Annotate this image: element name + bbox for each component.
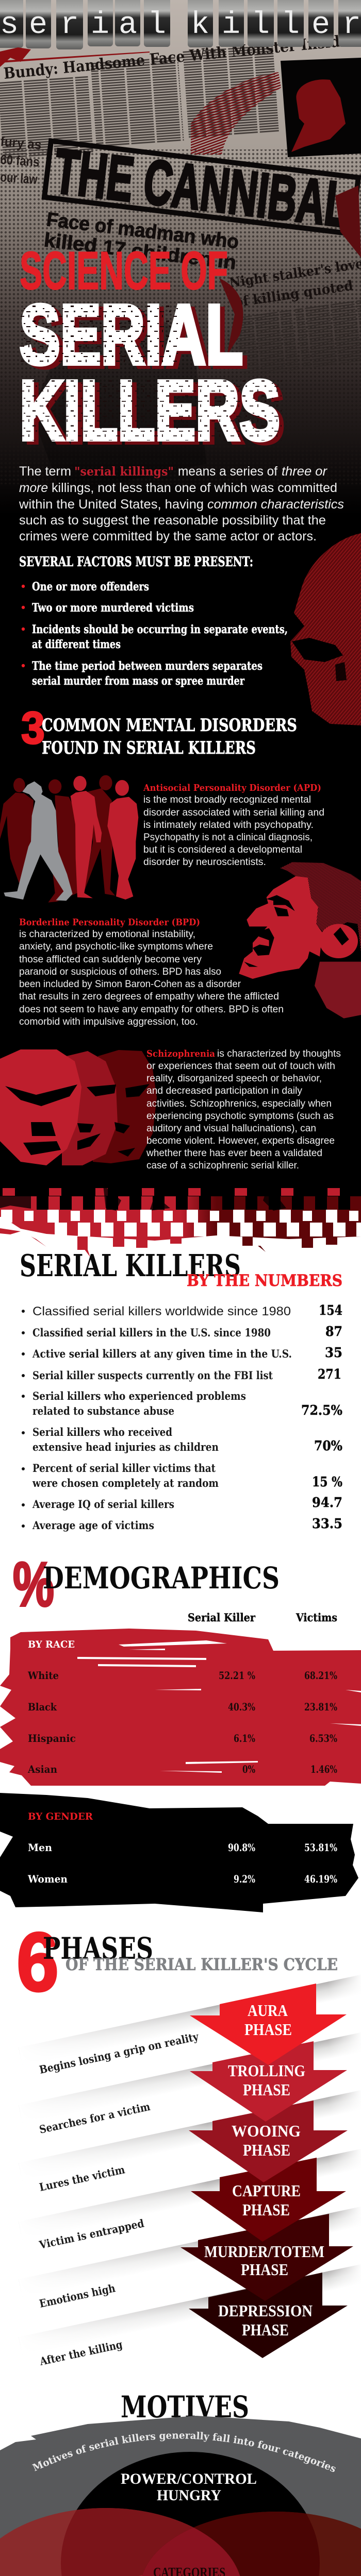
red rows: 68.21% [304,1669,337,1682]
intro paragraph: more [19,481,48,495]
typewriter keys: serial killer: e [311,8,330,43]
heading: 6 phases [17,1916,338,2009]
BPD text block: is characterized by emotional instability, [19,928,195,940]
typewriter keys: serial killer: l [251,8,270,43]
night stalker clipping: of killing quoted [234,278,354,311]
typewriter keys: serial killer: i [91,8,109,43]
schizophrenia text block: experiencing psychotic symptoms (such as [146,1110,334,1122]
phase descriptions [38,2030,200,2368]
schizophrenia text block: auditory and visual hallucinations), can [146,1123,316,1134]
intro paragraph: The term [19,464,71,479]
motives dome panel [0,2416,361,2576]
intro paragraph: such as to suggest the reasonable possibility that the [19,513,326,528]
circle: power control [61,2452,320,2576]
statistics numbers: 87 [325,1324,342,1340]
circle: visionary [0,2508,242,2576]
red rows: 6.53% [309,1732,337,1744]
newspaper photo block [281,58,361,157]
typewriter keys: serial killer: s [0,8,19,43]
skull illustration [290,533,361,725]
black brush stroke [0,1793,358,1912]
APD text block: but it is considered a developmental [143,844,302,855]
BPD text block: that results in zero degrees of empathy where the afflicted [19,991,279,1002]
heading: 3 common mental disorders [21,702,297,758]
circle: hedonistic [140,2512,361,2576]
BPD text block: those afflicted can suddenly become very [19,954,202,965]
statistics labels: Serial killers who experienced problems [32,1389,246,1402]
APD text block [143,783,324,868]
motive: power control: HUNGRY [157,2487,221,2504]
schizophrenia text block: or experiences that seem out of touch with [146,1060,335,1072]
black rows: 9.2% [234,1873,255,1885]
red rows: White [27,1669,59,1682]
statistics labels: Average IQ of serial killers [32,1498,174,1511]
statistics labels: Classified serial killers in the U.S. since 1980 [32,1326,271,1339]
red rows: 0% [242,1763,255,1775]
newspaper collage background [0,32,361,495]
factors text: One or more offenders [32,580,149,594]
BPD text block: comorbid with impulsive aggression, too. [19,1016,198,1027]
statistics labels: Serial killers who received [32,1426,172,1438]
statistics numbers: 271 [318,1367,341,1382]
typewriter keys: serial killer: r [342,8,361,43]
red rows: 52.21 % [219,1669,255,1682]
arrow: murder totem [180,2214,353,2301]
BPD text block [19,917,284,1027]
APD text block: disorder associated with serial killing and [143,807,324,818]
statistics numbers: 70% [314,1438,342,1454]
BPD heading: Borderline Personality Disorder (BPD) [19,917,200,928]
night stalker clipping [228,256,361,377]
heading: serial killers by the numbers: BY THE NUMBERS [187,1272,342,1290]
several factors list [19,554,288,688]
typewriter keys: serial killer: l [281,8,300,43]
title [19,241,285,461]
arrow: wooing [189,2100,348,2182]
schizophrenia text block: reality, disorganized speech or behavior, [146,1073,322,1084]
schizophrenia text block: become violent. However, experts disagree [146,1135,335,1146]
heading: 6 phases: 6 [17,1916,59,2009]
APD text block: is intimately related with psychopathy. [143,819,314,831]
heading: demographics: DEMOGRAPHICS [43,1561,280,1596]
statistics numbers: 35 [325,1345,342,1361]
statistics labels: related to substance abuse [32,1404,174,1417]
red rows: Asian [27,1763,57,1775]
black rows: BY GENDER [28,1811,93,1822]
phase descriptions: Emotions high [38,2281,117,2310]
statistics labels [32,1304,292,1532]
screaming man illustration [239,862,361,1019]
red rows: 1.46% [310,1763,337,1775]
red rows: BY RACE [28,1639,75,1650]
phase descriptions: Searches for a victim [38,2100,151,2136]
APD text block: disorder by neuroscientists. [143,856,266,868]
phase names: PHASE [242,2200,290,2219]
statistics labels: Classified serial killers worldwide since 1980 [32,1304,291,1318]
typewriter keys: serial killer: a [119,8,137,43]
blood splash right [219,185,361,355]
APD heading: Antisocial Personality Disorder (APD) [143,783,321,793]
factors text: The time period between murders separates [32,659,262,673]
intro paragraph: common characteristics [207,497,344,512]
overlaps of circles [61,2508,320,2576]
arrow: aura [190,1984,347,2065]
BPD text block: paranoid or suspicious of others. BPD has also [19,966,221,977]
phase names: PHASE [242,2320,289,2339]
demographics table [0,1611,361,1912]
phase names [204,2001,324,2339]
circle: mission oriented [55,2570,322,2576]
phase arrows [180,1984,353,2358]
side clipping: fury as [0,133,42,152]
intro paragraph [19,464,344,544]
column headings: Serial Killer [188,1611,256,1624]
statistics list [22,1303,342,1532]
factors bullets [22,585,25,667]
red rows: Hispanic [28,1732,76,1744]
red rows: 6.1% [234,1732,255,1744]
intro paragraph: three or [282,464,328,479]
ribbon shadows [19,1974,361,2357]
side clipping: our law [0,169,38,187]
heading: 3 common mental disorders: FOUND IN SERIAL KILLERS [42,738,256,758]
silhouettes of people [0,775,138,903]
typewriter keys: serial killer: l [147,8,166,43]
schizophrenia text block: whether there has ever been a validated [146,1147,322,1159]
red rows: 40.3% [228,1701,255,1713]
phase names: PHASE [243,2141,290,2159]
newspaper subheads [43,209,240,274]
statistics numbers: 72.5% [301,1403,342,1418]
statistics numbers: 33.5 [312,1516,342,1532]
phase names: MURDER/TOTEM [204,2242,324,2261]
schizophrenia text block: and decreased participation in daily [146,1085,302,1096]
typewriter keys: serial killer [0,0,361,67]
phase names: PHASE [244,2020,292,2039]
phase names: TROLLING [228,2061,305,2080]
factors text: Two or more murdered victims [32,601,194,615]
motive: power control: POWER/CONTROL [121,2470,257,2487]
arrow: capture [191,2158,346,2242]
phase names: AURA [248,2001,288,2020]
phase names: WOOING [232,2122,301,2140]
black rows: 90.8% [228,1841,255,1854]
typewriter keys: serial killer: k [191,8,209,43]
intro paragraph: crimes were committed by the same actor or actors. [19,529,317,544]
statistics bullets [22,1310,25,1528]
phase names: CAPTURE [232,2181,301,2200]
typewriter keys: serial killer: r [60,8,79,43]
intro paragraph: means a series of [178,464,277,479]
newspaper subheads: killed 17 children in [43,229,237,274]
black rows: Women [27,1873,68,1885]
intro paragraph: killings, not less than one of which was committed [52,481,337,495]
motive: power control [121,2470,257,2504]
intro paragraph: within the United States, having [19,497,204,512]
title: SERIAL [24,291,248,385]
three faces illustration [0,1049,157,1165]
typewriter keys: serial killer: e [29,8,47,43]
statistics numbers: 15 % [312,1475,342,1490]
arrow: depression [189,2273,348,2358]
red rows: 23.81% [304,1701,337,1713]
factors text: at different times [32,638,121,651]
heading: 3 common mental disorders: COMMON MENTAL DISORDERS [42,715,297,736]
BPD text block: does not seem to have any empathy for others. BPD is often [19,1004,284,1015]
heading: serial killers by the numbers: SERIAL KILLERS [20,1248,241,1283]
schizophrenia text block: is characterized by thoughts [217,1048,341,1059]
statistics numbers: 154 [319,1303,342,1318]
black rows: Men [28,1841,52,1854]
black rows: 53.81% [304,1841,337,1854]
factors text: serial murder from mass or spree murder [32,674,244,688]
arrow: trolling [190,2041,347,2122]
factors heading: SEVERAL FACTORS MUST BE PRESENT: [19,554,253,570]
APD text block: is the most broadly recognized mental [143,794,311,805]
statistics numbers [301,1303,342,1532]
side clipping [0,133,42,187]
statistics labels: Serial killer suspects currently on the FBI list [32,1369,273,1382]
red rows: Black [28,1701,57,1713]
column headings [188,1611,337,1624]
black rows [27,1811,337,1885]
schizophrenia text block: case of a schizophrenic serial killer. [146,1160,299,1171]
white paint streaks [77,1640,361,1773]
heading: 3 common mental disorders: 3 [21,702,45,753]
schizophrenia text block: activities. Schizophrenics, especially when [146,1098,332,1109]
intro paragraph: "serial killings" [74,465,174,479]
blood smear [191,72,281,155]
phase descriptions: Victim is entrapped [38,2216,145,2251]
schizophrenia term: Schizophrenia [146,1048,215,1059]
red brush stroke [0,1629,361,1786]
title: SERIAL [20,287,243,382]
title: SCIENCE OF [20,241,228,301]
BPD text block: been included by Simon Baron-Cohen as a disorder [19,978,241,990]
phase descriptions: Begins losing a grip on reality [38,2030,200,2076]
statistics labels: were chosen completely at random [32,1477,219,1489]
schizophrenia text block [146,1048,341,1171]
factors text: Incidents should be occurring in separate events, [32,623,288,636]
statistics numbers: 94.7 [312,1495,342,1511]
phase names: PHASE [241,2260,288,2279]
heading: demographics [13,1549,280,1619]
curved caption: Motives of serial killers generally fall into four categories [32,2432,336,2472]
newspaper subheads: Face of madman who [45,209,240,253]
dark blurred face shapes [31,310,206,495]
statistics labels: Average age of victims [32,1519,154,1532]
heading: 6 phases: PHASES [43,1931,153,1966]
phase names: DEPRESSION [218,2301,313,2320]
phase descriptions: Lures the victim [38,2163,126,2194]
APD text block: Psychopathy is not a clinical diagnosis, [143,832,313,843]
black rows: 46.19% [304,1873,337,1885]
phase descriptions: After the killing [38,2337,124,2368]
heading: demographics: % [13,1549,54,1619]
column headings: Victims [296,1611,337,1624]
statistics labels: Active serial killers at any given time in the U.S. [32,1347,292,1360]
statistics labels: Percent of serial killer victims that [32,1462,216,1475]
side clipping: 60 fans [0,151,40,170]
BPD text block: anxiety, and psychotic-like symptoms where [19,941,213,952]
phase names: PHASE [243,2080,290,2099]
red rows [27,1639,337,1775]
typewriter keys: serial killer: i [222,8,240,43]
checkered transition black to white [0,1185,361,1257]
heading: motives: MOTIVES [121,2389,249,2425]
statistics labels: extensive head injuries as children [32,1440,219,1453]
factors text [32,580,288,688]
